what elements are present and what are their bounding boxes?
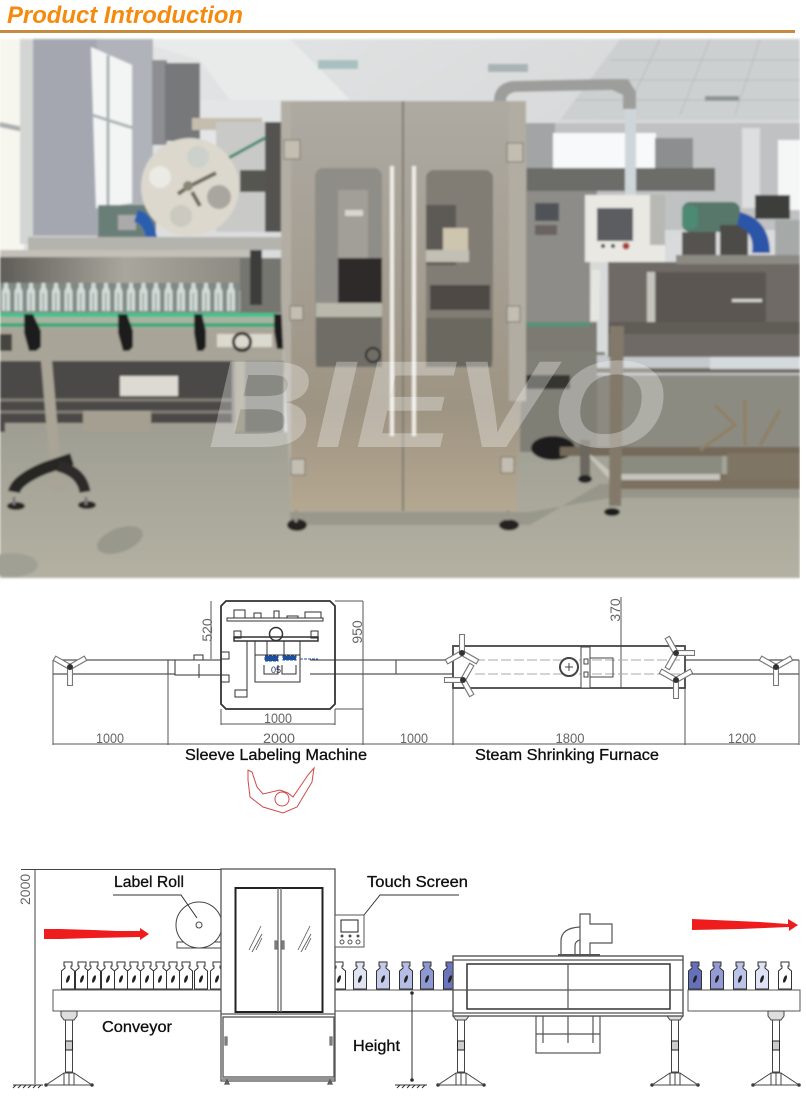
dimension labels bbox=[96, 598, 756, 746]
photo: back conveyor and motor bbox=[28, 237, 283, 250]
side-view labels: Height bbox=[353, 1038, 401, 1055]
side-view labels: Label Roll bbox=[114, 874, 184, 891]
photo: under-conveyor space bbox=[0, 361, 284, 432]
photo: conveyor side panel bbox=[0, 328, 283, 361]
photo: door hinges bbox=[284, 140, 523, 475]
photo: left wall and windows bbox=[0, 39, 24, 250]
touch screen panel bbox=[335, 915, 364, 947]
panel: machine photo bbox=[0, 33, 806, 593]
title: Product Introduction bbox=[7, 2, 243, 29]
photo: green motor and blue hose bbox=[682, 202, 740, 232]
bottles on conveyor bbox=[62, 962, 792, 989]
arrow: infeed direction bbox=[44, 928, 149, 940]
photo: right furnace under-frame bbox=[597, 368, 800, 453]
dimension labels: 2000 bbox=[263, 730, 295, 746]
panel: top-view layout drawing bbox=[53, 597, 799, 813]
photo: back wall bbox=[525, 123, 800, 230]
steam furnace front view bbox=[453, 914, 683, 1053]
station label: 05 bbox=[271, 665, 281, 675]
photo: brand watermark: BIEVO bbox=[208, 336, 666, 474]
dimension labels: 1000 bbox=[264, 710, 292, 726]
steam shrinking furnace plan bbox=[453, 646, 685, 688]
dimension labels: 950 bbox=[349, 620, 365, 644]
machine name labels: Sleeve Labeling Machine bbox=[185, 747, 367, 764]
dimension labels: 1800 bbox=[556, 730, 585, 746]
height dimension bbox=[395, 992, 427, 1088]
photo: left door window bbox=[315, 168, 382, 367]
icon: operator figure bbox=[248, 768, 314, 813]
photo: green conveyor rail bbox=[0, 313, 282, 328]
photo: floor bbox=[0, 432, 800, 578]
touch screen leader bbox=[364, 895, 459, 915]
label roll leader bbox=[113, 895, 197, 918]
conveyor bed bbox=[53, 990, 800, 1011]
side-view labels: Touch Screen bbox=[367, 874, 468, 891]
photo: central stainless cabinet bbox=[281, 101, 526, 511]
dimension labels: 1000 bbox=[400, 730, 428, 746]
dimension lines bbox=[53, 597, 799, 745]
conveyor stands bbox=[45, 1011, 800, 1086]
machine name labels: Steam Shrinking Furnace bbox=[475, 747, 659, 764]
photo: pole and black foot bbox=[41, 361, 63, 492]
conveyor stars bbox=[54, 634, 792, 699]
photo: door handles bbox=[390, 166, 394, 436]
height dimension 2000 bbox=[13, 869, 221, 1088]
conveyor lines bbox=[53, 660, 799, 674]
dimension labels: 370 bbox=[607, 598, 623, 622]
arrow: outfeed direction bbox=[692, 919, 798, 931]
dimension labels: 520 bbox=[199, 618, 215, 642]
photo: bottle conveyor housing bbox=[0, 250, 255, 258]
sleeve labeling machine plan bbox=[175, 601, 335, 709]
side-view labels: Conveyor bbox=[102, 1019, 172, 1036]
photo: steam furnace body bbox=[608, 262, 800, 357]
photo: label roll disc bbox=[141, 138, 239, 236]
label roll bbox=[176, 902, 222, 948]
photo: right door window bbox=[426, 170, 493, 367]
photo: overhead duct bbox=[494, 79, 636, 109]
photo: machine feet bbox=[287, 519, 307, 531]
dimension labels: 1000 bbox=[96, 730, 124, 746]
photo: rear machine between cabinet and furnace bbox=[525, 168, 597, 340]
photo: white right margin bbox=[800, 33, 806, 593]
photo: touch panel bbox=[585, 195, 665, 262]
panel: side-view line drawing bbox=[13, 869, 800, 1088]
photo backdrop: ceiling bbox=[0, 39, 800, 578]
side-view labels bbox=[102, 874, 468, 1055]
dimension labels: 1200 bbox=[728, 730, 756, 746]
title underline rule bbox=[0, 30, 795, 33]
machine name labels bbox=[185, 747, 659, 764]
height dimension 2000: 2000 bbox=[17, 874, 33, 905]
labeling machine front view bbox=[221, 869, 335, 1084]
blue sleeve station marks bbox=[265, 656, 318, 661]
